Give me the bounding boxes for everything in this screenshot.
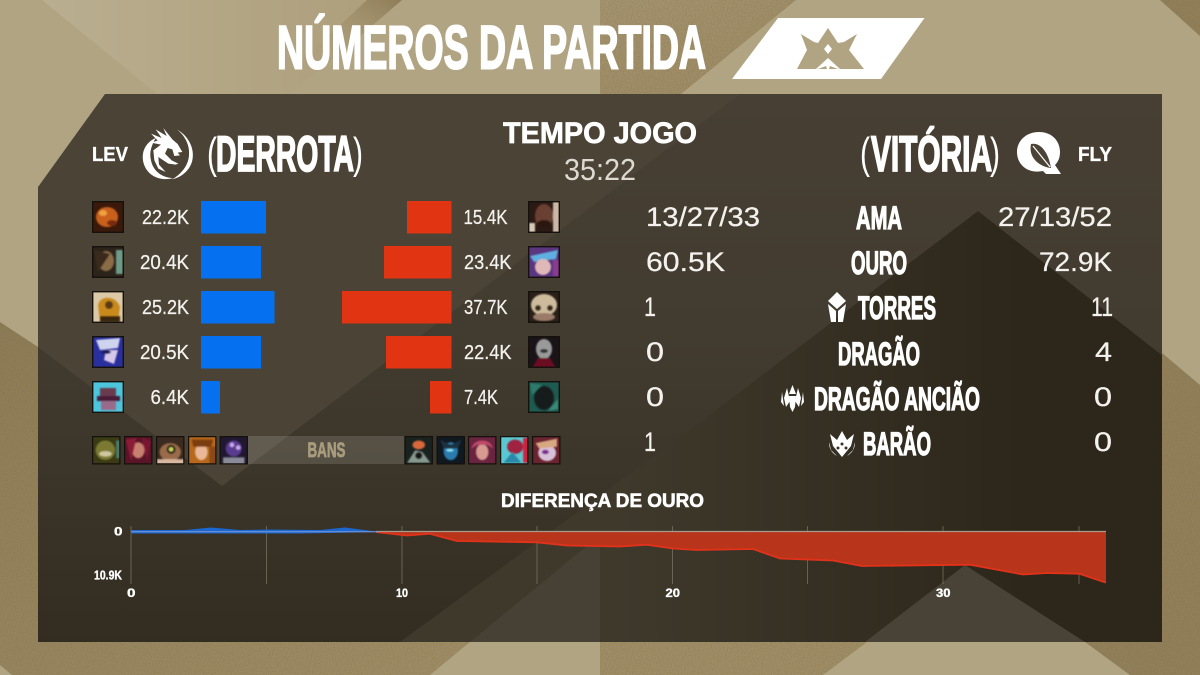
gold values: LEV [140, 207, 190, 409]
stats table: row labels: DRAGÃO ANCIÃO [814, 381, 980, 417]
y axis labels: 0 [114, 524, 123, 538]
game time: TEMPO JOGO [503, 117, 697, 150]
title: NÚMEROS DA PARTIDA [277, 14, 706, 82]
stats table: FLY values [998, 202, 1113, 457]
stats table: LEV values: 1 [644, 427, 656, 457]
stats table: row labels [781, 200, 980, 462]
x axis labels: 0 [127, 586, 136, 600]
gold values: LEV: 22.2K [142, 207, 190, 229]
icon: tower [828, 292, 846, 322]
stats table: LEV values: 1 [644, 292, 656, 322]
bans label: BANS [308, 439, 346, 462]
stats table: LEV values: 0 [646, 337, 664, 367]
team header: FLY victory: FLY [1078, 144, 1113, 166]
x axis labels: 20 [666, 586, 680, 600]
heading: VITORIA: ( [860, 129, 870, 178]
gold values: FLY: 37.7K [464, 297, 508, 319]
gridlines [131, 526, 1079, 584]
red area: FLY lead [376, 532, 1106, 583]
stats table: row labels: TORRES [858, 290, 936, 326]
stats table: row labels: OURO [851, 245, 907, 281]
heading: DERROTA: ( [207, 129, 217, 178]
chart heading: DIFERENÇA DE OURO [501, 491, 704, 512]
stats table: LEV values: 0 [646, 382, 664, 412]
gold values: FLY: 7.4K [464, 387, 499, 409]
heading: VITORIA: ) [990, 129, 1000, 178]
gold values: LEV: 20.4K [140, 252, 190, 274]
bans row [92, 436, 560, 464]
stats table: FLY values: 11 [1091, 292, 1113, 322]
gold values: FLY: 22.4K [464, 342, 512, 364]
game time [503, 117, 697, 187]
stats table: row labels: BARÃO [863, 426, 931, 462]
heading: DERROTA: DERROTA [216, 126, 354, 182]
stats table: LEV values: 13/27/33 [646, 202, 760, 232]
champion icons: LEV players [92, 201, 124, 413]
icon: baron [829, 431, 855, 457]
FLY banned champions [404, 436, 560, 464]
team header: FLY victory [860, 126, 1113, 182]
x axis labels: 10 [396, 586, 408, 600]
stats table: FLY values: 4 [1095, 337, 1112, 367]
x axis labels: 30 [936, 586, 951, 600]
heading: DERROTA [207, 126, 363, 182]
gold values: LEV: 25.2K [142, 297, 190, 319]
x axis labels [127, 586, 951, 600]
icon: LEV dragon logo [143, 128, 193, 179]
team header: LEV defeat [92, 126, 363, 182]
heading: VITORIA: VITÓRIA [871, 126, 992, 182]
area chart: gold difference [94, 524, 1106, 600]
gold values: LEV: 20.5K [140, 342, 190, 364]
stats table: LEV values: 60.5K [646, 247, 725, 277]
game time: 35:22 [564, 152, 636, 187]
gold values: FLY: 23.4K [464, 252, 512, 274]
logo badge: tournament emblem [732, 18, 924, 79]
icon: elder dragon [781, 385, 804, 412]
y axis labels: 10.9K [94, 568, 122, 582]
gold values: FLY [464, 207, 512, 409]
bar chart: LEV gold [201, 201, 274, 414]
icon: FLY logo [1017, 132, 1061, 174]
bar chart: FLY gold [342, 201, 452, 414]
stats table: row labels: DRAGÃO [838, 336, 920, 372]
stats table: row labels: AMA [856, 200, 902, 236]
stats table: FLY values: 27/13/52 [998, 202, 1112, 232]
y axis labels [94, 524, 123, 582]
panel: dark match stats background [38, 94, 1162, 642]
zero line [376, 530, 1106, 532]
stats table: FLY values: 0 [1094, 427, 1112, 457]
LEV banned champions [92, 436, 248, 464]
blue area: LEV lead [131, 528, 380, 534]
stats table: FLY values: 0 [1094, 382, 1112, 412]
panel: player gold rows [92, 201, 560, 414]
champion icons: FLY players [528, 201, 560, 413]
team header: LEV defeat: LEV [92, 144, 129, 166]
heading: DERROTA: ) [353, 129, 363, 178]
stats table: FLY values: 72.9K [1039, 247, 1112, 277]
gold values: LEV: 6.4K [150, 387, 190, 409]
gold values: FLY: 15.4K [464, 207, 508, 229]
stats table: LEV values [644, 202, 760, 457]
heading: VITORIA [860, 126, 1000, 182]
